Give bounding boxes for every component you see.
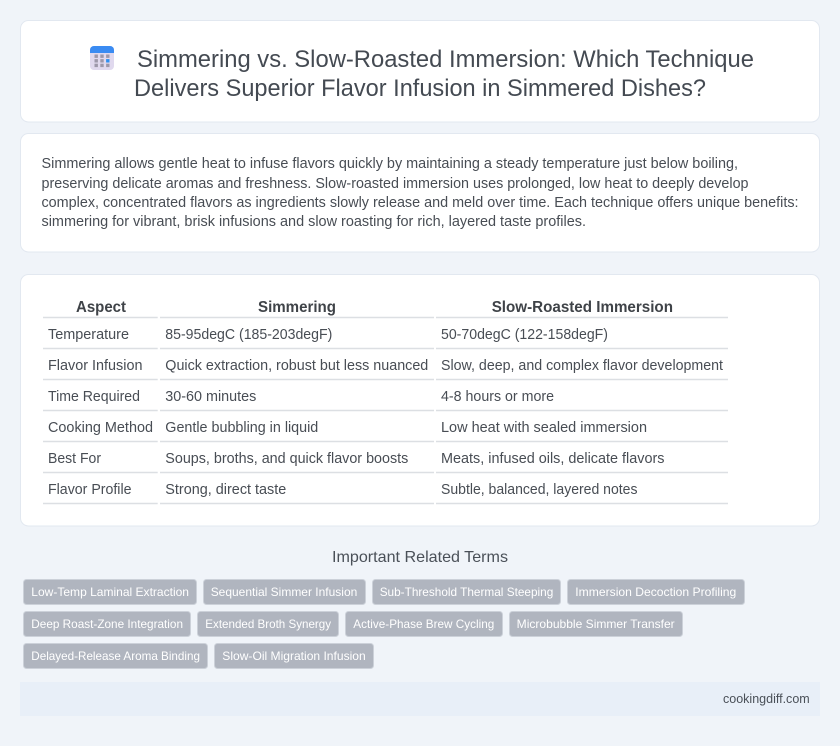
tag: Extended Broth Synergy	[205, 617, 331, 631]
title: Delivers Superior Flavor Infusion in Simmered Dishes?	[134, 75, 706, 102]
row: best for	[48, 451, 664, 467]
tag: Low-Temp Laminal Extraction	[31, 585, 189, 599]
tag	[214, 644, 374, 668]
row: time required: 4-8 hours or more	[441, 389, 554, 405]
tag	[24, 644, 208, 668]
tag: Deep Roast-Zone Integration	[31, 617, 183, 631]
tag: Active-Phase Brew Cycling	[353, 617, 494, 631]
tag: Sub-Threshold Thermal Steeping	[380, 585, 553, 599]
tag	[204, 580, 366, 604]
tag	[198, 612, 338, 636]
row: cooking method: Gentle bubbling in liquid	[165, 420, 318, 436]
footer bar	[20, 682, 820, 716]
row: temperature	[48, 327, 608, 343]
tag	[568, 580, 744, 604]
tag: Immersion Decoction Profiling	[575, 585, 736, 599]
row: flavor profile	[48, 482, 638, 498]
header panel	[20, 20, 820, 122]
row: time required: Time Required	[48, 389, 140, 405]
icon: calendar	[90, 46, 114, 70]
intro paragraph: Simmering allows gentle heat to infuse flavors quickly by maintaining a steady temperature just below boiling,	[42, 156, 738, 172]
footer site name: cookingdiff.com	[723, 691, 810, 706]
tag: Microbubble Simmer Transfer	[517, 617, 675, 631]
comparison table panel	[20, 274, 820, 526]
row: temperature: 50-70degC (122-158degF)	[441, 327, 608, 343]
row: best for: Best For	[48, 451, 101, 467]
tag: Delayed-Release Aroma Binding	[31, 649, 200, 663]
table header row: Aspect	[76, 299, 126, 316]
related term tags	[24, 580, 744, 668]
row: temperature: Temperature	[48, 327, 129, 343]
table header row: Slow-Roasted Immersion	[492, 299, 673, 316]
intro paragraph	[42, 156, 798, 230]
row: flavor profile: Strong, direct taste	[165, 482, 286, 498]
table header row	[76, 299, 673, 316]
tag	[510, 612, 682, 636]
tag	[346, 612, 502, 636]
tag	[372, 580, 560, 604]
row: cooking method	[48, 420, 647, 436]
row: flavor profile: Subtle, balanced, layered notes	[441, 482, 638, 498]
title	[134, 46, 754, 102]
tag: Sequential Simmer Infusion	[211, 585, 357, 599]
row: flavor infusion	[48, 358, 723, 374]
row: best for: Soups, broths, and quick flavor boosts	[165, 451, 408, 467]
row: flavor profile: Flavor Profile	[48, 482, 132, 498]
row: time required	[48, 389, 554, 405]
row: temperature: 85-95degC (185-203degF)	[165, 327, 332, 343]
intro text panel	[20, 134, 820, 252]
intro paragraph: simmering for vibrant, brisk infusions and slow roasting for rich, layered taste profiles.	[42, 214, 586, 230]
row: cooking method: Low heat with sealed immersion	[441, 420, 647, 436]
intro paragraph: complex, concentrated flavors as ingredients slowly release and meld over time. Each technique offers unique benefits:	[42, 195, 798, 211]
row: cooking method: Cooking Method	[48, 420, 153, 436]
row: flavor infusion: Slow, deep, and complex flavor development	[441, 358, 723, 374]
heading: related terms: Important Related Terms	[332, 549, 508, 566]
tag	[24, 612, 190, 636]
intro paragraph: preserving delicate aromas and freshness. Slow-roasted immersion uses prolonged, low heat to deeply develop	[42, 176, 748, 192]
tag	[24, 580, 196, 604]
table header row: Simmering	[258, 299, 336, 316]
title: Simmering vs. Slow-Roasted Immersion: Which Technique	[137, 46, 754, 73]
row: flavor infusion: Quick extraction, robust but less nuanced	[165, 358, 428, 374]
tag: Slow-Oil Migration Infusion	[222, 649, 366, 663]
row: best for: Meats, infused oils, delicate flavors	[441, 451, 664, 467]
row: time required: 30-60 minutes	[165, 389, 256, 405]
row: flavor infusion: Flavor Infusion	[48, 358, 142, 374]
